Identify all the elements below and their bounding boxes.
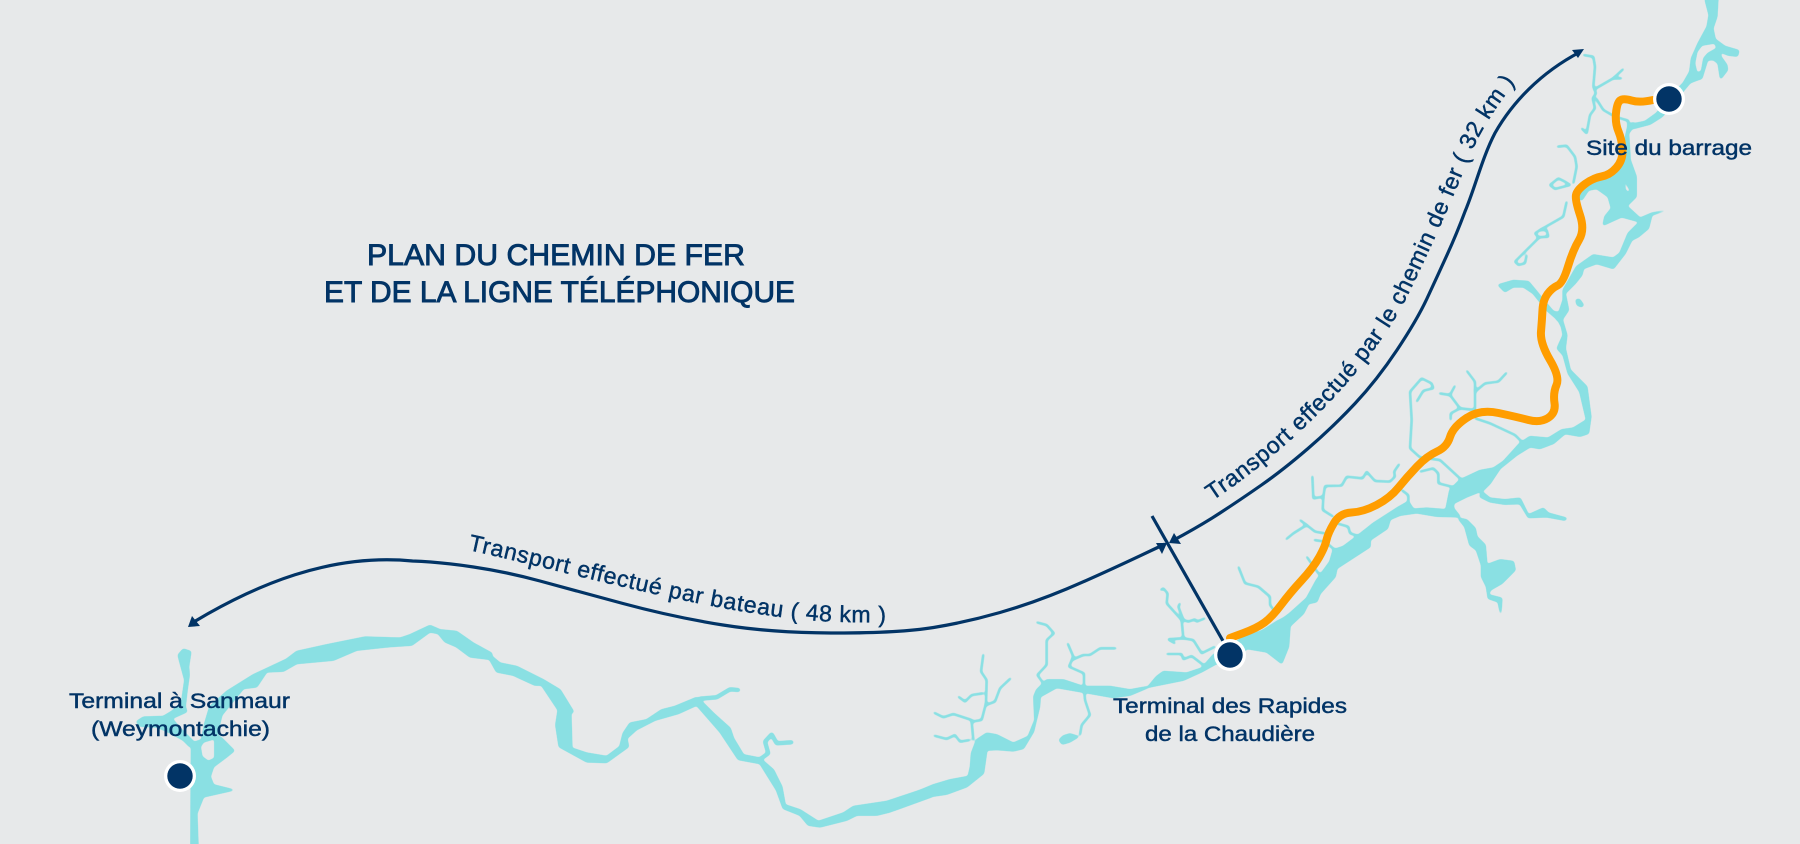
river: central reach — [478, 646, 932, 827]
title: PLAN DU CHEMIN DE FER — [367, 239, 745, 272]
label: terminal des Rapides de la Chaudière: de la Chaudière — [1145, 723, 1315, 746]
railway route — [1230, 99, 1653, 638]
marker: terminal des Rapides de la Chaudière — [1214, 639, 1246, 671]
label: terminal des Rapides de la Chaudière — [1113, 695, 1347, 746]
label: terminal des Rapides de la Chaudière: Terminal des Rapides — [1113, 695, 1347, 718]
marker: terminal à Sanmaur — [164, 760, 196, 792]
arrow: railway transport span — [1169, 49, 1584, 544]
label: terminal à Sanmaur — [69, 690, 290, 741]
arrow: boat transport span — [188, 543, 1167, 633]
label: terminal à Sanmaur: (Weymontachie) — [91, 718, 270, 741]
river: Rapides de la Chaudière reach — [898, 588, 1290, 808]
marker: site du barrage — [1653, 83, 1685, 115]
river: upper reach near dam site — [1498, 0, 1739, 320]
label: transport by railway: Transport effectué par le chemin de fer ( 32 km ) — [1204, 76, 1516, 498]
river: middle reach with lake and tributaries — [1238, 318, 1591, 640]
divider line from junction to terminal — [1152, 516, 1223, 641]
label: transport by boat: Transport effectué par bateau ( 48 km ) — [471, 534, 885, 628]
river: western reach at Sanmaur — [137, 626, 492, 844]
title: ET DE LA LIGNE TÉLÉPHONIQUE — [324, 276, 795, 309]
label: site du barrage: Site du barrage — [1586, 137, 1752, 160]
title — [324, 239, 795, 309]
label: terminal à Sanmaur: Terminal à Sanmaur — [69, 690, 290, 713]
